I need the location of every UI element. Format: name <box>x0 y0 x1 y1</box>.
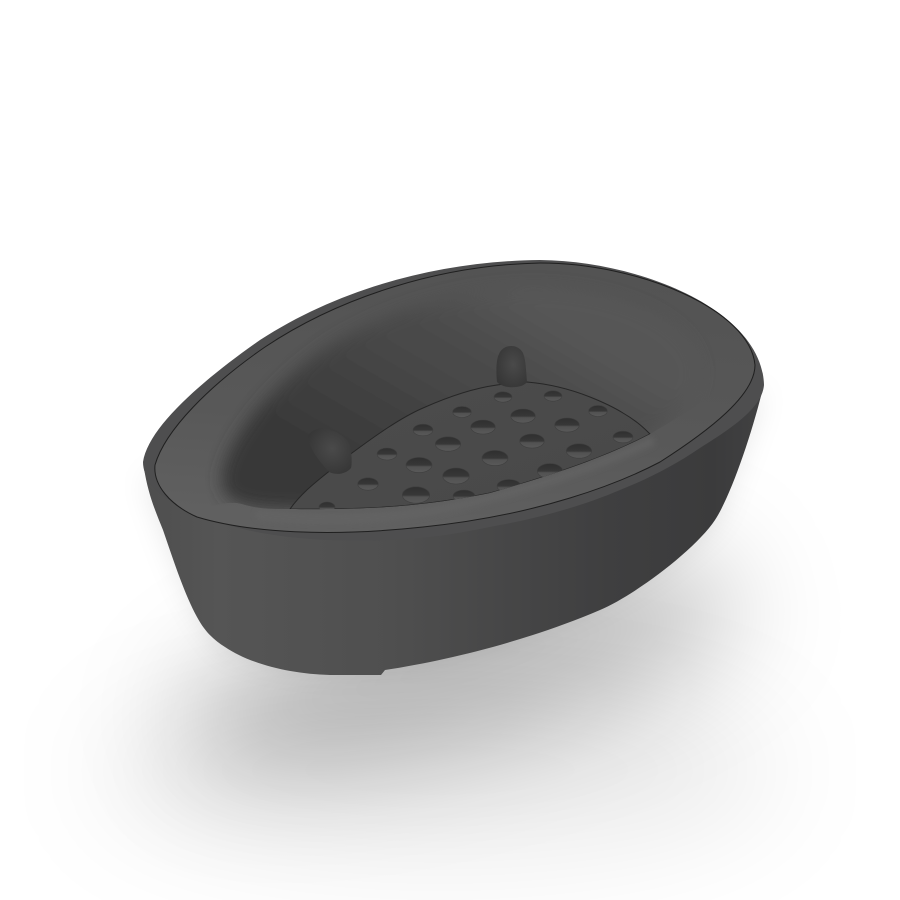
left peg <box>308 428 352 474</box>
bowl outer body <box>144 392 762 675</box>
illustration: dark grey oval soap dish <box>113 260 772 876</box>
lip highlight <box>489 493 490 494</box>
rim outer band <box>143 260 764 541</box>
drain holes <box>319 391 633 512</box>
perforated draining plate <box>290 382 650 512</box>
thin rim seam line <box>155 263 755 532</box>
front lip over plate <box>228 434 652 518</box>
rim inner lip surface <box>155 263 755 532</box>
rear peg <box>496 346 527 387</box>
inner wall of the bowl <box>216 312 652 509</box>
drop shadow <box>100 392 780 860</box>
